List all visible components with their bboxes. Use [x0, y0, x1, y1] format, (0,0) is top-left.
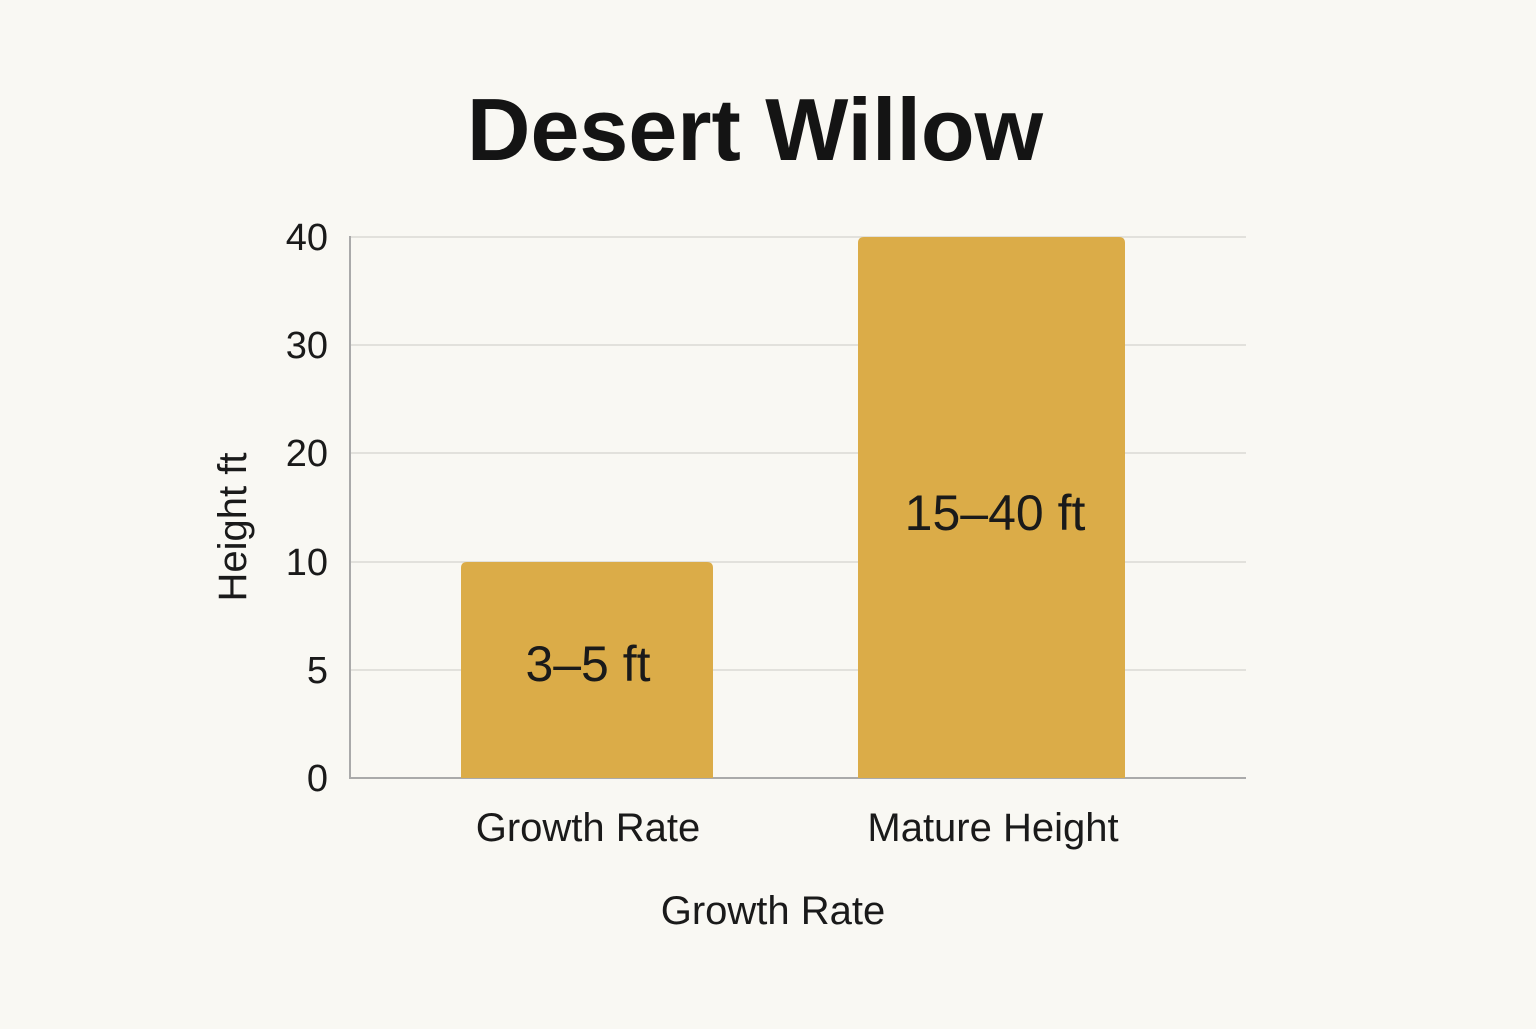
- bar: growth rate: 3–5 ft: [525, 636, 651, 692]
- bar: mature height: 15–40 ft: [905, 485, 1085, 541]
- x axis title: Growth Rate: [661, 889, 885, 933]
- bar chart: [211, 217, 1246, 933]
- y tick labels: 20: [286, 433, 328, 475]
- y tick labels: 0: [307, 758, 328, 800]
- y tick labels: 40: [286, 217, 328, 259]
- axes: [349, 236, 1246, 779]
- x category labels: Mature Height: [867, 806, 1119, 850]
- x category labels: Growth Rate: [476, 806, 700, 850]
- y tick labels: 10: [286, 542, 328, 584]
- title: Desert Willow: [467, 80, 1044, 179]
- x category labels: [476, 806, 1119, 850]
- bar: growth rate: [461, 562, 713, 778]
- bar: mature height: [858, 237, 1125, 778]
- y tick labels: 5: [307, 650, 328, 692]
- y axis title: Height ft: [211, 453, 255, 601]
- y tick labels: [286, 217, 328, 800]
- y tick labels: 30: [286, 325, 328, 367]
